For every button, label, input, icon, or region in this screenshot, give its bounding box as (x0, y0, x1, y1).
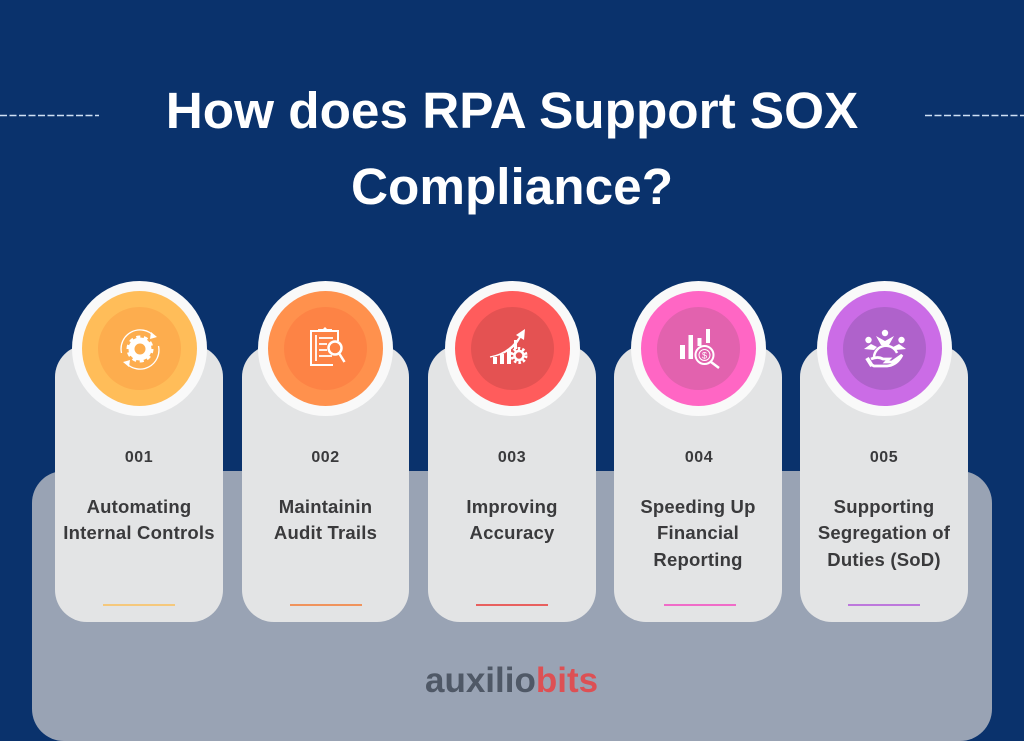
accent bar 001 (103, 604, 175, 606)
accent bar 002 (290, 604, 362, 606)
card 004 (614, 345, 782, 622)
left dashed line (0, 114, 99, 116)
accent bar 003 (476, 604, 548, 606)
accent bar 004 (664, 604, 736, 606)
label 002: Audit Trails (274, 522, 377, 543)
label 001: Automating (87, 496, 191, 517)
label 001 (63, 496, 215, 543)
icon circle: growth chart with gear (444, 281, 580, 416)
label 004: Financial (657, 522, 739, 543)
label 005: Segregation of (818, 522, 950, 543)
label 005: Supporting (834, 496, 934, 517)
icon circle: hand holding people (816, 281, 952, 416)
icon circle: clipboard search (258, 281, 393, 416)
icon circle: bar chart with dollar magnifier: $ (701, 350, 707, 360)
label 003 (466, 496, 558, 543)
card 002 (242, 345, 409, 622)
right dashed line (925, 114, 1024, 116)
logo: auxiliobits (425, 661, 598, 700)
number 004: 004 (685, 449, 713, 466)
label 001: Internal Controls (63, 522, 215, 543)
card 005 (800, 345, 968, 622)
accent bar 005 (848, 604, 920, 606)
bottom panel (32, 471, 992, 741)
label 003: Accuracy (470, 522, 554, 543)
number 002: 002 (311, 449, 340, 466)
label 004: Speeding Up (640, 496, 756, 517)
icon circle: bar chart with dollar magnifier (630, 281, 766, 416)
label 005: Duties (SoD) (827, 549, 941, 570)
title: How does RPA Support SOX (166, 82, 858, 139)
number 005: 005 (870, 449, 898, 466)
label 002: Maintainin (279, 496, 372, 517)
label 004 (640, 496, 756, 570)
label 005 (818, 496, 950, 570)
label 002 (274, 496, 377, 543)
label 004: Reporting (653, 549, 743, 570)
title: Compliance? (351, 158, 673, 214)
title (166, 82, 858, 214)
icon circle: gear cycle (72, 281, 206, 416)
card 003 (428, 345, 596, 622)
label 003: Improving (466, 496, 558, 517)
number 003: 003 (498, 449, 526, 466)
card 001 (55, 345, 223, 622)
number 001: 001 (125, 449, 153, 466)
